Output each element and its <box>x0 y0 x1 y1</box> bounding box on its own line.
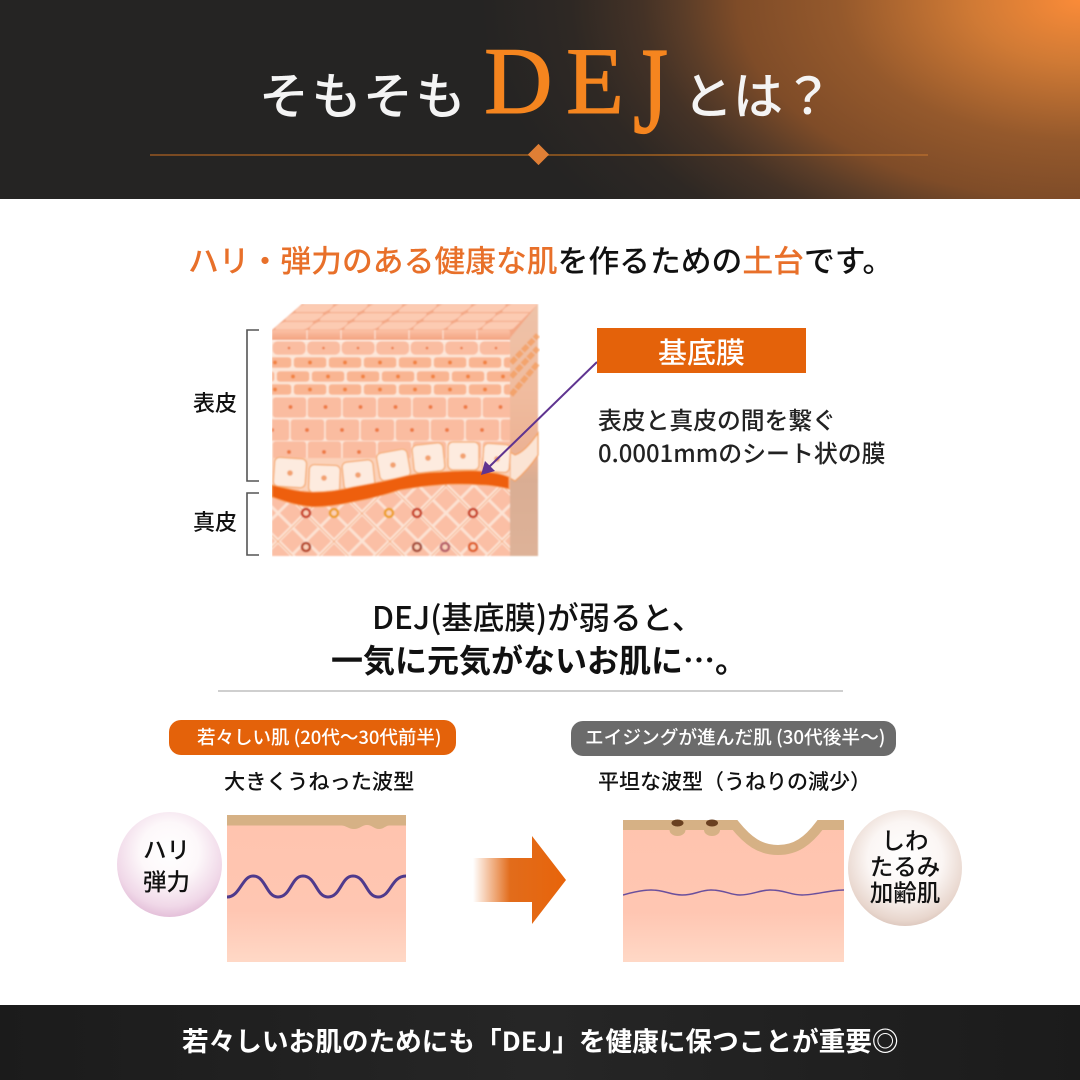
label box: basement membrane <box>597 328 806 373</box>
bubble text: wrinkles <box>870 822 940 908</box>
caption: large wave: 大きくうねった波型 <box>224 765 414 796</box>
caption: flat wave: 平坦な波型（うねりの減少） <box>598 766 871 796</box>
title: DEJ: J <box>633 21 668 160</box>
title: DEJ: D <box>484 28 553 134</box>
title ornament diamond <box>528 144 549 165</box>
subtitle: ハリ・弾力のある健康な肌を作るための土台です。 <box>188 236 893 281</box>
label: dermis: 真皮 <box>193 505 237 537</box>
title: DEJ <box>484 21 668 160</box>
brackets <box>246 329 259 556</box>
description second line: 0.0001mmのシート状の膜 <box>598 434 886 469</box>
bubble: firmness <box>117 812 222 917</box>
pointer arrow to basement membrane <box>481 361 597 475</box>
dermis net <box>272 485 510 556</box>
epidermis front layers <box>272 339 510 489</box>
dermis circles <box>302 509 477 551</box>
side face <box>510 304 538 556</box>
pill: aged skin <box>571 721 896 756</box>
title ornament line <box>150 154 928 156</box>
young skin diagram <box>227 815 406 962</box>
basal cells <box>272 442 511 494</box>
bubble: wrinkles <box>848 810 962 926</box>
title: DEJ: E <box>566 28 624 134</box>
footer text: 若々しいお肌のためにも「DEJ」を健康に保つことが重要◎ <box>182 1020 899 1059</box>
basement membrane band <box>272 471 509 507</box>
header band <box>0 0 1080 199</box>
heading line 1: DEJ(基底膜)が弱ると、 <box>372 593 703 639</box>
skin cross-section illustration <box>272 304 540 557</box>
bubble text: firmness: 弾力 <box>143 863 190 897</box>
top face <box>272 304 538 340</box>
bubble text: wrinkles: 加齢肌 <box>870 874 940 908</box>
bubble text: firmness: ハリ <box>143 831 190 865</box>
footer band <box>0 1005 1080 1080</box>
divider <box>218 690 843 692</box>
bubble text: wrinkles: たるみ <box>870 848 940 882</box>
title: somosomo: そもそも <box>259 57 468 129</box>
description: 表皮と真皮の間を繋ぐ <box>598 401 836 436</box>
label: epidermis: 表皮 <box>193 386 237 418</box>
title: to wa: とは？ <box>683 57 833 129</box>
pill text: young skin: 若々しい肌 (20代〜30代前半) <box>197 724 442 750</box>
bubble text: firmness <box>143 831 190 897</box>
bubble text: wrinkles: しわ <box>882 822 928 856</box>
label box: basement membrane: 基底膜 <box>658 330 745 372</box>
pill text: aged skin: エイジングが進んだ肌 (30代後半〜) <box>585 723 885 750</box>
pill: young skin <box>169 720 456 755</box>
transition arrow <box>474 836 566 924</box>
heading line 2: 一気に元気がないお肌に…。 <box>331 636 747 682</box>
aged skin diagram <box>623 820 844 962</box>
